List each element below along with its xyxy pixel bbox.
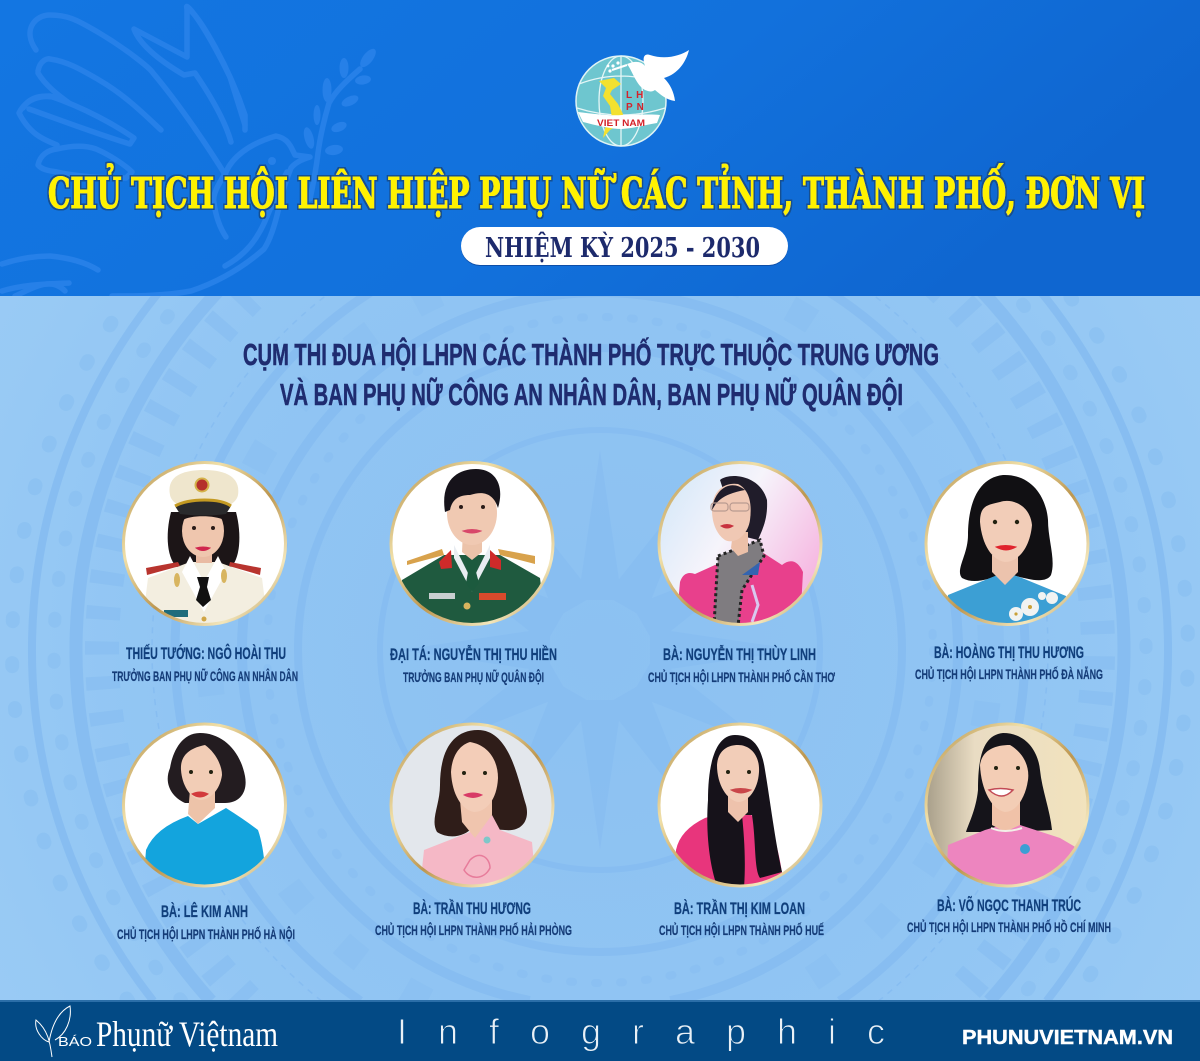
name: BÀ: TRẦN THỊ KIM LOAN bbox=[674, 899, 805, 918]
logo: Vietnam Women's Union emblem: VIET NAM bbox=[597, 118, 645, 129]
name: BÀ: VÕ NGỌC THANH TRÚC bbox=[937, 895, 1081, 915]
role: CHỦ TỊCH HỘI LHPN THÀNH PHỐ HUẾ bbox=[659, 921, 824, 938]
card: Võ Ngọc Thanh Trúc bbox=[907, 724, 1111, 935]
portrait: Hanoi chair bbox=[124, 724, 286, 888]
portrait: Hai Phong chair bbox=[391, 724, 553, 888]
name: BÀ: TRẦN THU HƯƠNG bbox=[413, 899, 531, 918]
card: Nguyễn Thị Thu Hiền bbox=[390, 462, 557, 685]
role: TRƯỞNG BAN PHỤ NỮ QUÂN ĐỘI bbox=[403, 668, 544, 685]
portrait: Da Nang chair bbox=[926, 462, 1088, 626]
portrait: Hue chair bbox=[659, 724, 821, 888]
card: Ngô Hoài Thu bbox=[112, 462, 298, 684]
role: CHỦ TỊCH HỘI LHPN THÀNH PHỐ HÀ NỘI bbox=[117, 925, 295, 942]
name: BÀ: LÊ KIM ANH bbox=[161, 902, 248, 921]
dove watermark bbox=[2, 7, 379, 296]
portrait: army colonel bbox=[391, 462, 553, 626]
term pill: NHIỆM KỲ 2025 - 2030 bbox=[485, 231, 760, 264]
footer logo: Báo Phụ nữ Việt Nam: Phụnữ Việtnam bbox=[96, 1014, 278, 1054]
role: CHỦ TỊCH HỘI LHPN THÀNH PHỐ CẦN THƠ bbox=[648, 668, 835, 685]
section heading bbox=[243, 336, 939, 412]
panel: header background bbox=[0, 0, 1200, 296]
card: Hoàng Thị Thu Hương bbox=[915, 462, 1103, 682]
footer logo: Báo Phụ nữ Việt Nam bbox=[36, 1006, 278, 1057]
role: CHỦ TỊCH HỘI LHPN THÀNH PHỐ HẢI PHÒNG bbox=[375, 921, 572, 938]
portrait: Ho Chi Minh City chair bbox=[926, 724, 1088, 888]
logo: Vietnam Women's Union emblem: PN bbox=[626, 102, 648, 113]
card: Trần Thu Hương bbox=[375, 724, 572, 938]
logo: Vietnam Women's Union emblem bbox=[576, 50, 689, 146]
footer bar bbox=[0, 1000, 1200, 1061]
footer website: PHUNUVIETNAM.VN bbox=[962, 1027, 1173, 1049]
panel: main background with drum pattern bbox=[12, 296, 1172, 1000]
card: Nguyễn Thị Thùy Linh bbox=[648, 462, 835, 685]
name: BÀ: HOÀNG THỊ THU HƯƠNG bbox=[934, 643, 1084, 662]
card: Lê Kim Anh bbox=[117, 724, 295, 942]
portrait: Can Tho chair bbox=[659, 462, 821, 626]
name: THIẾU TƯỚNG: NGÔ HOÀI THU bbox=[126, 644, 286, 663]
card: Trần Thị Kim Loan bbox=[659, 724, 824, 938]
portrait: police general bbox=[124, 462, 286, 626]
name: ĐẠI TÁ: NGUYỄN THỊ THU HIỀN bbox=[390, 645, 557, 664]
footer logo: Báo Phụ nữ Việt Nam: BÁO bbox=[58, 1034, 92, 1049]
footer label: Infographic bbox=[397, 1011, 885, 1052]
name: BÀ: NGUYỄN THỊ THÙY LINH bbox=[663, 645, 816, 664]
term pill bbox=[461, 227, 788, 266]
logo: Vietnam Women's Union emblem: LH bbox=[626, 90, 647, 101]
role: TRƯỞNG BAN PHỤ NỮ CÔNG AN NHÂN DÂN bbox=[112, 667, 298, 684]
